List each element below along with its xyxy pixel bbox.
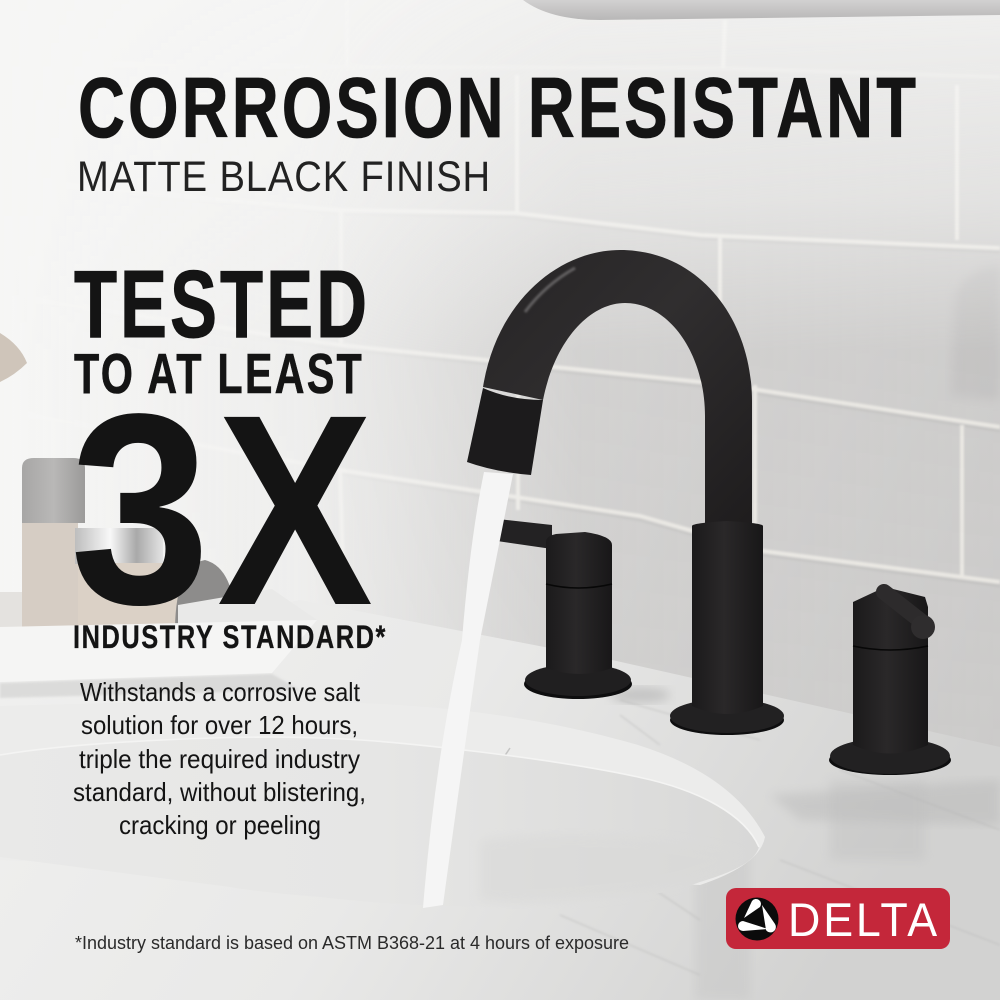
claim: tested to at least 3X: INDUSTRY STANDARD*	[73, 619, 387, 655]
footnote: *Industry standard is based on ASTM B368-21 at 4 hours of exposure	[75, 933, 629, 953]
claim: tested to at least 3X	[70, 251, 387, 662]
description text: standard, without blistering,	[73, 777, 366, 807]
cosmetic tray with bottles	[0, 333, 317, 698]
description text: Withstands a corrosive salt	[80, 677, 361, 707]
left handle	[497, 519, 632, 699]
subtitle: MATTE BLACK FINISH	[77, 153, 491, 201]
brush head	[175, 560, 236, 628]
marble counter and basin	[0, 600, 1000, 1000]
claim: tested to at least 3X: X	[217, 358, 374, 662]
claim: tested to at least 3X: TO AT LEAST	[74, 342, 364, 406]
jar	[75, 528, 178, 629]
water stream	[423, 472, 513, 908]
tray	[0, 589, 317, 698]
description text	[73, 677, 366, 840]
right handle	[829, 587, 951, 775]
claim: tested to at least 3X: TESTED	[74, 251, 370, 358]
bottle	[22, 458, 85, 628]
shadow of handle base	[610, 687, 670, 703]
undermount basin	[0, 737, 759, 907]
makeup brush tip	[0, 333, 27, 382]
wordmark: DELTA	[788, 893, 940, 946]
aerator	[467, 388, 543, 475]
marble rim	[0, 702, 765, 885]
logo: Delta	[726, 888, 950, 949]
faucet shadows and reflections	[770, 780, 1000, 825]
description text: solution for over 12 hours,	[81, 710, 358, 740]
gooseneck spout	[483, 250, 752, 530]
description text: triple the required industry	[79, 744, 360, 774]
claim: tested to at least 3X: 3	[70, 357, 210, 661]
description text: cracking or peeling	[119, 810, 321, 840]
icon: delta emblem	[736, 898, 778, 940]
faucet	[423, 250, 951, 908]
spout base body	[670, 521, 784, 735]
overhead sink edge	[523, 0, 1000, 20]
